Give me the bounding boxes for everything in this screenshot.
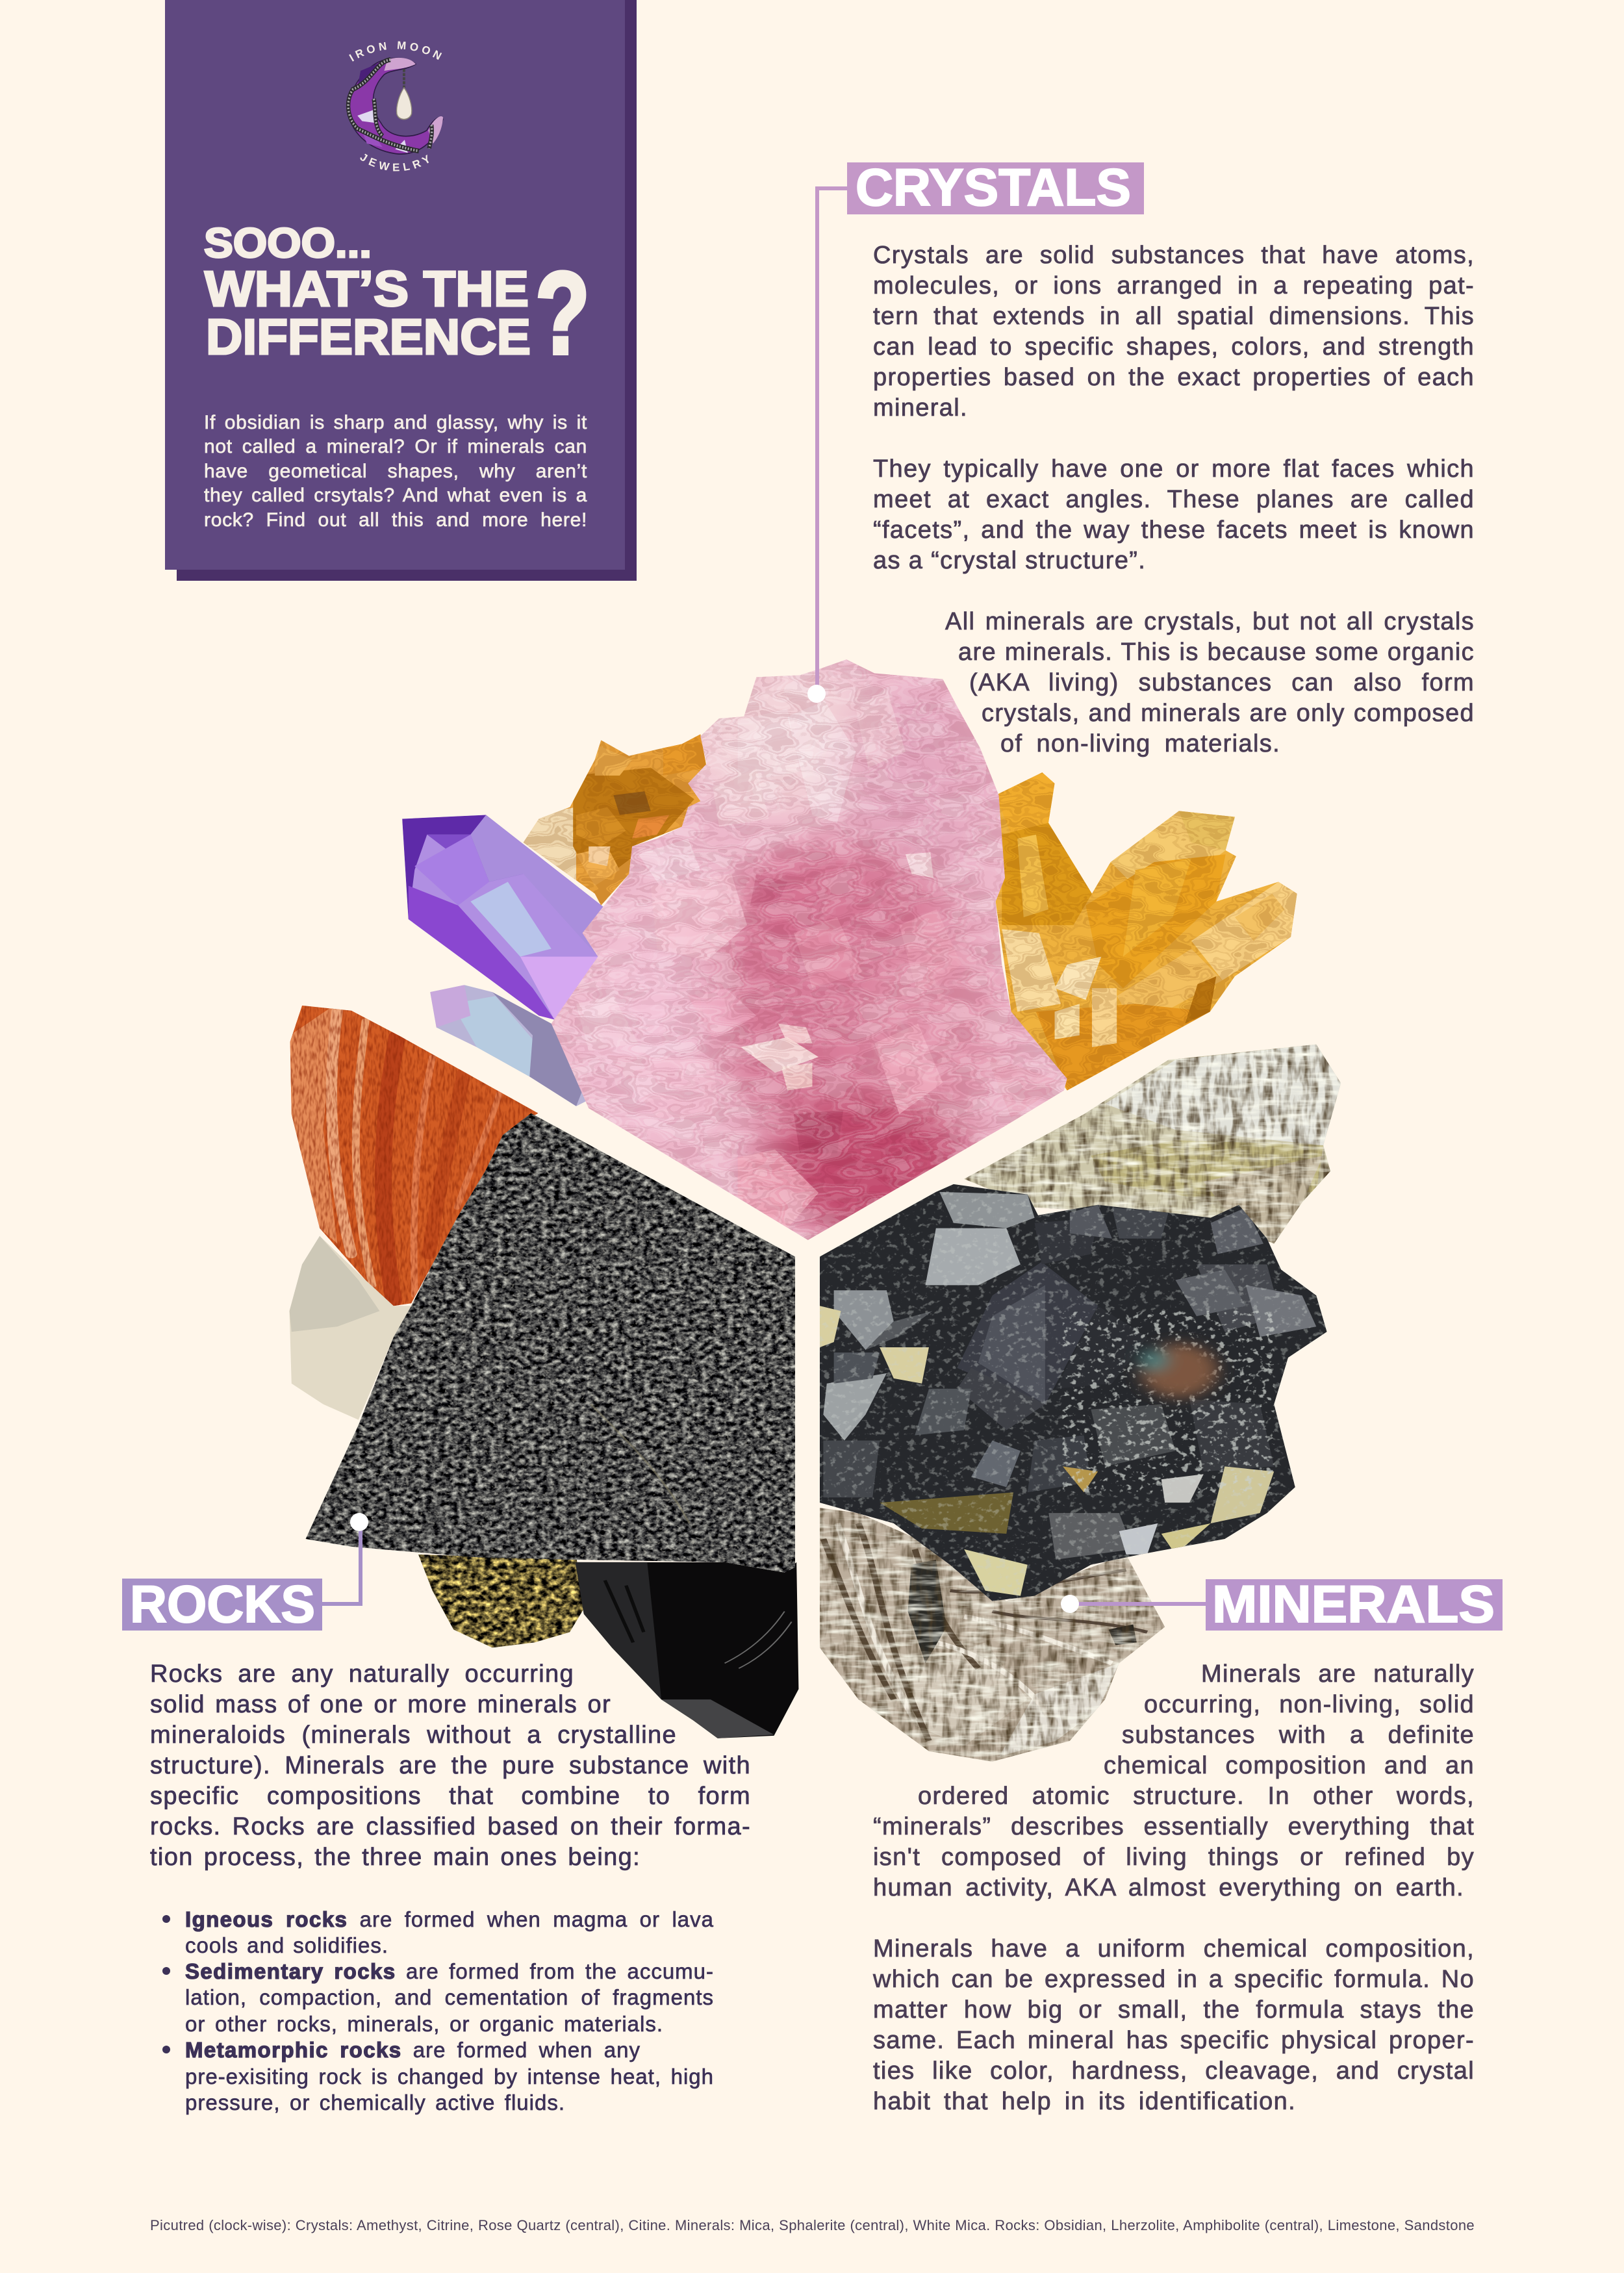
text: crystals description: “facets”, and the way these facets meet is known: [873, 516, 1475, 544]
text: minerals description: which can be expressed in a specific formula. No: [873, 1966, 1475, 1993]
icon: Iron Moon Jewelry logo: JEWELRY: [360, 153, 429, 171]
icon: large amethyst: [402, 815, 603, 1020]
icon: obsidian: [576, 1562, 798, 1738]
text: intro paragraph: [204, 412, 587, 531]
list: three rock types: Sedimentary rocks are formed from the accumu-: [185, 1959, 714, 1983]
list: three rock types: pressure, or chemically active fluids.: [185, 2090, 565, 2114]
icon: sphalerite central mineral: [817, 1182, 1330, 1606]
text: minerals description: matter how big or small, the formula stays the: [873, 1996, 1475, 2024]
text: rocks description: Rocks are any naturally occurring: [150, 1660, 574, 1688]
text: minerals description: isn't composed of living things or refined by: [873, 1844, 1475, 1871]
text: rocks description: [150, 1660, 751, 1871]
connector: rocks: [322, 1513, 368, 1604]
list: three rock types: [162, 1907, 714, 2115]
text: crystals description: mineral.: [873, 394, 968, 422]
connector: minerals: [1061, 1595, 1206, 1613]
list: three rock types: or other rocks, minerals, or organic materials.: [185, 2012, 663, 2036]
text: rocks description: rocks. Rocks are classified based on their forma-: [150, 1813, 751, 1840]
text: minerals description: [872, 1660, 1475, 2115]
text: intro paragraph: have geometical shapes, why aren’t: [204, 461, 587, 482]
crystals specimen photo group: [396, 657, 1303, 1244]
text: crystals description: meet at exact angles. These planes are called: [873, 486, 1475, 513]
icon: amphibolite granite central rock: [295, 1109, 802, 1575]
list: three rock types: Igneous rocks are formed when magma or lava: [185, 1907, 714, 1931]
text: minerals description: substances with a definite: [1122, 1721, 1475, 1749]
text: crystals description: can lead to specific shapes, colors, and strength: [873, 333, 1475, 361]
title: crystals: CRYSTALS: [856, 159, 1131, 217]
text: rocks description: solid mass of one or more minerals or: [150, 1691, 611, 1718]
text: crystals description: All minerals are crystals, but not all crystals: [945, 608, 1475, 635]
text: minerals description: Minerals have a uniform chemical composition,: [873, 1935, 1475, 1962]
text: rocks description: tion process, the three main ones being:: [150, 1844, 641, 1871]
heading: Sooo... what's the difference: [204, 220, 590, 379]
text: crystals description: properties based on the exact properties of each: [873, 364, 1475, 391]
icon: white mica bottom: [817, 1503, 1175, 1767]
text: rocks description: structure). Minerals are the pure substance with: [150, 1752, 751, 1779]
text: rocks description: specific compositions that combine to form: [150, 1783, 751, 1810]
text: minerals description: ties like color, hardness, cleavage, and crystal: [873, 2057, 1475, 2085]
text: crystals description: Crystals are solid substances that have atoms,: [873, 242, 1475, 269]
icon: Iron Moon Jewelry logo: [346, 42, 444, 171]
text: intro paragraph: rock? Find out all this and more here!: [204, 509, 587, 531]
icon: citrine cluster right: [986, 768, 1303, 1095]
text: intro paragraph: not called a mineral? Or if minerals can: [204, 436, 587, 457]
panel: intro card with drop shadow: [165, 0, 637, 581]
text: crystals description: crystals, and minerals are only composed: [982, 700, 1475, 727]
text: minerals description: same. Each mineral has specific physical proper-: [873, 2027, 1475, 2054]
heading: Sooo... what's the difference: SOOO...: [204, 220, 372, 266]
heading: Sooo... what's the difference: ?: [535, 248, 590, 379]
title: rocks: ROCKS: [130, 1575, 315, 1634]
text: minerals description: human activity, AKA almost everything on earth.: [873, 1874, 1464, 1901]
text: crystals description: They typically have one or more flat faces which: [873, 455, 1475, 483]
text: crystals description: as a “crystal structure”.: [873, 547, 1146, 574]
text: minerals description: Minerals are naturally: [1201, 1660, 1475, 1688]
text: minerals description: occurring, non-living, solid: [1144, 1691, 1475, 1718]
text: minerals description: chemical composition and an: [1104, 1752, 1475, 1779]
icon: limestone: [290, 1236, 411, 1420]
list: three rock types: cools and solidifies.: [185, 1933, 388, 1957]
footer: picture credits: Picutred (clock-wise): Crystals: Amethyst, Citrine, Rose Quartz (central), Citine. Minerals: Mica, Sphalerite (central), White Mica. Rocks: Obsidian, Lherzolite, Amphibolite (central), Limestone, Sandstone: [150, 2217, 1475, 2233]
text: crystals description: tern that extends in all spatial dimensions. This: [873, 303, 1475, 330]
icon: orange sandstone: [290, 1006, 538, 1306]
heading: Sooo... what's the difference: DIFFERENCE: [206, 309, 531, 365]
text: intro paragraph: they called crsytals? And what even is a: [204, 485, 587, 506]
rocks and minerals photo group: [281, 1000, 1352, 1767]
text: rocks description: mineraloids (minerals without a crystalline: [150, 1721, 677, 1749]
icon: lherzolite: [418, 1554, 583, 1647]
text: crystals description: of non-living materials.: [1000, 730, 1280, 757]
text: minerals description: “minerals” describes essentially everything that: [873, 1813, 1475, 1840]
text: intro paragraph: If obsidian is sharp and glassy, why is it: [204, 412, 587, 433]
text: minerals description: habit that help in its identification.: [873, 2088, 1296, 2115]
icon: Iron Moon Jewelry logo: IRON MOON: [349, 42, 442, 62]
list: three rock types: pre-exisiting rock is changed by intense heat, high: [185, 2064, 714, 2089]
text: minerals description: ordered atomic structure. In other words,: [918, 1783, 1475, 1810]
text: crystals description: are minerals. This is because some organic: [958, 639, 1475, 666]
list: three rock types: lation, compaction, and cementation of fragments: [185, 1985, 714, 2009]
title: minerals: MINERALS: [1212, 1575, 1495, 1634]
list: three rock types: Metamorphic rocks are formed when any: [185, 2038, 641, 2062]
icon: small amethyst: [430, 985, 586, 1106]
icon: citrine cluster left: [524, 734, 706, 906]
icon: mica top: [957, 1042, 1352, 1249]
heading: Sooo... what's the difference: WHAT’S THE: [205, 261, 529, 317]
text: crystals description: (AKA living) substances can also form: [969, 669, 1475, 696]
text: crystals description: [873, 242, 1475, 757]
connector: crystals: [807, 188, 847, 703]
icon: rose quartz central crystal: [545, 657, 1073, 1244]
text: crystals description: molecules, or ions arranged in a repeating pat-: [873, 272, 1475, 299]
